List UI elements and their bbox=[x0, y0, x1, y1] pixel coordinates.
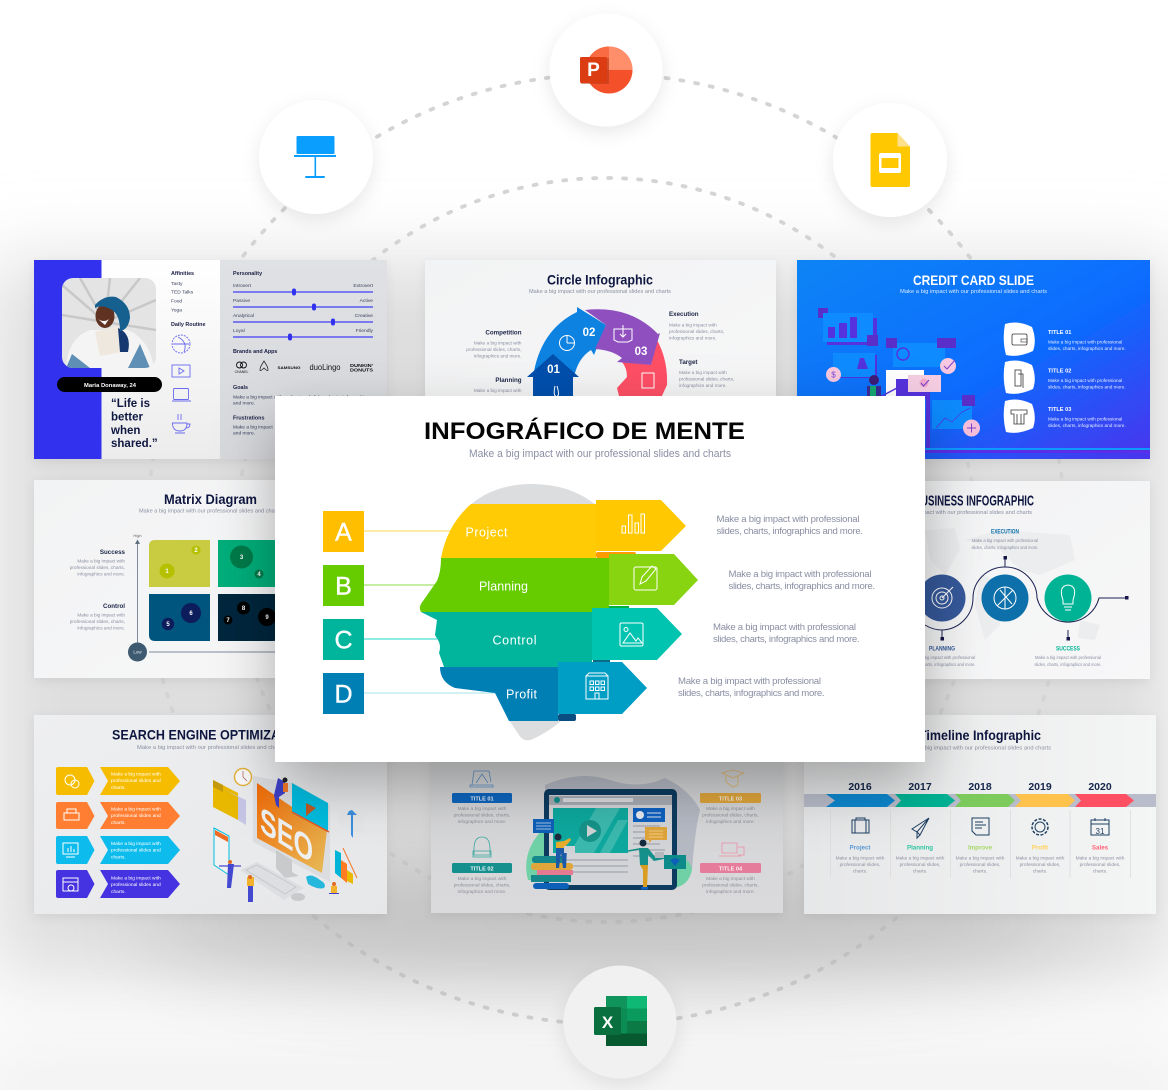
arrow rows: charts. bbox=[111, 854, 126, 860]
affinities: Yoga bbox=[171, 308, 182, 314]
matrix bubbles: 8 bbox=[242, 606, 246, 612]
quote: “Life is bbox=[111, 398, 150, 410]
four titled notes: infographics and more. bbox=[706, 889, 755, 895]
circular arrows: 02 bbox=[583, 327, 595, 339]
arrow rows: charts. bbox=[111, 820, 126, 826]
process circles bbox=[918, 574, 1092, 622]
timeline entries: professional slides, bbox=[1080, 862, 1120, 868]
arrow rows: charts. bbox=[111, 785, 126, 791]
personality sliders: Introvert bbox=[233, 283, 252, 289]
feature rows: TITLE 02 bbox=[1048, 368, 1071, 374]
icon: Google Slides bbox=[833, 103, 947, 217]
years: 2020 bbox=[1088, 781, 1112, 793]
panel: credit card slide: Make a big impact with our professional slides and charts bbox=[900, 289, 1047, 295]
four titled notes: Make a big impact with bbox=[706, 876, 755, 882]
panel: credit card slide bbox=[797, 260, 1150, 459]
panel: circle infographic bbox=[425, 260, 776, 460]
side labels: infographics and more. bbox=[474, 354, 522, 358]
SEO illustration: SEO bbox=[260, 799, 313, 872]
affinities bbox=[171, 271, 205, 328]
side labels: Success bbox=[100, 549, 126, 556]
feature rows: Make a big impact with professional bbox=[1048, 378, 1122, 383]
panel: online learning bbox=[431, 740, 783, 913]
feature rows: slides, charts, infographics and more. bbox=[1048, 346, 1126, 351]
personality sliders: Friendly bbox=[356, 328, 374, 334]
four titled notes: professional slides, charts, bbox=[454, 812, 510, 818]
feature rows bbox=[1004, 323, 1126, 433]
icon: PowerPoint: P bbox=[587, 60, 600, 81]
illustration: $ bbox=[831, 370, 836, 380]
daily routine icons bbox=[172, 335, 191, 433]
head illustration bbox=[420, 484, 636, 740]
connector line bbox=[925, 556, 1128, 640]
panel: search engine optimization: Make a big impact with our professional slides and charts bbox=[137, 745, 284, 751]
brands and apps: SAMSUNG bbox=[278, 365, 300, 370]
timeline entries: charts. bbox=[1093, 868, 1107, 874]
timeline entries: Make a big impact with bbox=[956, 856, 1005, 862]
matrix bubbles: 5 bbox=[166, 622, 170, 628]
arrow rows: Make a big impact with bbox=[111, 772, 161, 778]
stage labels bbox=[908, 528, 1102, 667]
panel: search engine optimization bbox=[34, 715, 387, 914]
band labels: Control bbox=[492, 634, 536, 648]
descriptions: slides, charts, infographics and more. bbox=[728, 581, 875, 592]
four titled notes: TITLE 04 bbox=[719, 866, 743, 872]
four titled notes: TITLE 01 bbox=[470, 796, 494, 802]
goals and frustrations: and more. bbox=[233, 400, 255, 406]
matrix bubbles: 4 bbox=[257, 572, 261, 578]
side labels: Make a big impact with bbox=[77, 558, 125, 564]
matrix axes: High bbox=[133, 533, 142, 538]
personality sliders bbox=[233, 271, 374, 340]
years: 2018 bbox=[968, 781, 992, 793]
years bbox=[848, 781, 1112, 793]
timeline entries: professional slides, bbox=[900, 862, 940, 868]
matrix bubbles: 2 bbox=[194, 548, 198, 554]
side labels: Competition bbox=[485, 330, 522, 336]
timeline entries: Planning bbox=[907, 844, 933, 852]
affinities: Affinities bbox=[171, 271, 194, 277]
descriptions: slides, charts, infographics and more. bbox=[678, 688, 824, 699]
four titled notes: professional slides, charts, bbox=[702, 882, 759, 888]
stage labels: slides, charts, infographics and more. bbox=[1034, 662, 1102, 667]
panel: business infographic bbox=[880, 481, 1150, 679]
side labels: Make a big impact with bbox=[474, 388, 522, 393]
timeline entries: Profit bbox=[1032, 844, 1048, 852]
four titled notes: professional slides, charts, bbox=[702, 812, 759, 818]
brands and apps: duoLingo bbox=[310, 362, 341, 372]
years: 2017 bbox=[908, 781, 932, 793]
timeline entries: charts. bbox=[913, 868, 927, 874]
band labels: Planning bbox=[479, 580, 528, 594]
arrow rows: Make a big impact with bbox=[111, 841, 161, 847]
personality sliders: Passive bbox=[233, 298, 250, 304]
panel: matrix diagram: Make a big impact with our professional slides and charts bbox=[139, 508, 281, 514]
affinities: Daily Routine bbox=[171, 322, 205, 328]
timeline entries: charts. bbox=[1033, 868, 1047, 874]
timeline icons bbox=[852, 818, 1109, 838]
side labels: Make a big impact with bbox=[77, 612, 125, 618]
four titled notes: professional slides, charts, bbox=[454, 882, 510, 888]
matrix axes bbox=[128, 533, 278, 662]
side labels: Make a big impact with bbox=[669, 322, 717, 328]
stage labels: Make a big impact with professional bbox=[972, 538, 1038, 543]
descriptions: slides, charts, infographics and more. bbox=[713, 634, 860, 645]
years: 2019 bbox=[1028, 781, 1052, 793]
side labels: Make a big impact with bbox=[679, 370, 727, 375]
icon: Keynote bbox=[259, 100, 373, 214]
years: 2016 bbox=[848, 781, 872, 793]
feature rows: Make a big impact with professional bbox=[1048, 416, 1122, 422]
four titled notes: infographics and more. bbox=[458, 889, 506, 895]
tag icons bbox=[586, 514, 657, 699]
feature rows: slides, charts, infographics and more. bbox=[1048, 423, 1126, 428]
timeline entries: Make a big impact with bbox=[896, 856, 945, 862]
stage labels: Make a big impact with professional bbox=[909, 655, 975, 660]
arrow rows: professional slides and bbox=[111, 882, 161, 888]
matrix bubbles: 1 bbox=[165, 569, 169, 575]
heading: Matrix Diagram bbox=[164, 491, 257, 507]
feature rows: slides, charts, infographics and more. bbox=[1048, 384, 1126, 390]
matrix bubbles: 7 bbox=[226, 618, 230, 624]
band labels: Project bbox=[466, 526, 508, 540]
circular arrows: 03 bbox=[635, 346, 647, 358]
brands and apps: DUNKIN' bbox=[350, 363, 373, 368]
quote: shared.” bbox=[111, 438, 158, 450]
four titled notes bbox=[452, 793, 761, 895]
descriptions: Make a big impact with professional bbox=[716, 514, 860, 525]
descriptions: Make a big impact with professional bbox=[713, 622, 856, 633]
brands and apps: DONUTS bbox=[350, 368, 373, 372]
learning illustration bbox=[526, 776, 700, 890]
side labels: Execution bbox=[669, 311, 699, 318]
note icons bbox=[470, 770, 744, 857]
descriptions bbox=[678, 514, 875, 699]
circular arrows bbox=[527, 307, 667, 400]
timeline ribbon bbox=[804, 794, 1156, 807]
matrix axes: Low bbox=[133, 650, 142, 654]
timeline entries: charts. bbox=[973, 868, 987, 874]
side labels: professional slides, charts, bbox=[669, 329, 724, 334]
brands and apps: Brands and Apps bbox=[233, 349, 277, 355]
letter boxes with leader lines bbox=[323, 511, 497, 714]
SEO illustration bbox=[213, 768, 364, 902]
personality sliders: Analytical bbox=[233, 313, 254, 319]
matrix bubbles bbox=[160, 546, 276, 630]
stage labels: PLANNING bbox=[929, 646, 955, 652]
goals and frustrations: and more. bbox=[233, 430, 255, 436]
goals and frustrations: Frustrations bbox=[233, 416, 264, 422]
timeline entries bbox=[836, 844, 1125, 874]
letter boxes with leader lines: A bbox=[335, 518, 352, 546]
side labels: Planning bbox=[495, 377, 522, 384]
dashed orbit: inner bbox=[234, 178, 978, 922]
arrow rows: professional slides and bbox=[111, 813, 161, 819]
side labels: Control bbox=[103, 603, 125, 610]
timeline entries: professional slides, bbox=[960, 862, 1000, 868]
arrow rows: Make a big impact with bbox=[111, 806, 161, 812]
side labels: infographics and more. bbox=[669, 336, 717, 340]
panel: timeline infographic: 31 bbox=[1096, 827, 1105, 836]
feature rows: TITLE 03 bbox=[1048, 407, 1071, 413]
personality sliders: Loyal bbox=[233, 328, 245, 334]
side labels: infographics and more. bbox=[77, 626, 125, 630]
stage labels: slides, charts, infographics and more. bbox=[908, 662, 976, 667]
title: INFOGRÁFICO DE MENTE bbox=[424, 417, 745, 445]
subtitle: Make a big impact with our professional slides and charts bbox=[469, 448, 731, 460]
lower shadow falling over the orbits bbox=[136, 860, 1076, 990]
four titled notes: TITLE 02 bbox=[470, 866, 494, 872]
panel: main card, mind infographic bbox=[275, 396, 925, 762]
affinities: Food bbox=[171, 298, 182, 304]
quote: when bbox=[110, 425, 140, 437]
feature rows: TITLE 01 bbox=[1048, 330, 1071, 336]
icon: Excel: X bbox=[602, 1013, 614, 1032]
feature rows: Make a big impact with professional bbox=[1048, 340, 1122, 344]
side labels: Target bbox=[679, 359, 697, 366]
name pill bbox=[57, 377, 162, 392]
timeline entries: Sales bbox=[1092, 844, 1109, 852]
timeline entries: Make a big impact with bbox=[836, 856, 885, 862]
descriptions: Make a big impact with professional bbox=[678, 676, 821, 687]
world map bbox=[925, 528, 1100, 640]
heading: CREDIT CARD SLIDE bbox=[913, 272, 1034, 288]
four titled notes: Make a big impact with bbox=[458, 876, 507, 882]
side labels: professional slides, charts, bbox=[70, 619, 125, 624]
side labels: professional slides, charts, bbox=[70, 565, 125, 570]
arrow rows: charts. bbox=[111, 889, 126, 895]
panel: matrix diagram bbox=[34, 480, 314, 678]
timeline entries: professional slides, bbox=[1020, 862, 1060, 868]
timeline entries: Improve bbox=[968, 844, 993, 852]
panel: persona slide bbox=[34, 260, 387, 459]
matrix bubbles: 9 bbox=[265, 615, 269, 621]
side labels bbox=[70, 549, 126, 630]
band labels: Profit bbox=[506, 688, 538, 702]
letter boxes with leader lines: D bbox=[334, 680, 353, 708]
stage labels: SUCCESS bbox=[1056, 646, 1080, 652]
panel: timeline infographic bbox=[804, 715, 1156, 914]
heading: BUSINESS INFOGRAPHIC bbox=[914, 492, 1034, 510]
side labels: infographics and more. bbox=[77, 572, 125, 576]
stage labels: EXECUTION bbox=[991, 528, 1019, 536]
arrow rows bbox=[56, 767, 180, 898]
brands and apps: CHANEL bbox=[235, 370, 248, 374]
stage labels: Make a big impact with professional bbox=[1035, 655, 1101, 660]
goals and frustrations: Make a big impact with professional slides, charts, infographics bbox=[233, 394, 370, 400]
side labels: professional slides, charts, bbox=[466, 347, 522, 352]
heading: Circle Infographic bbox=[547, 272, 653, 288]
circular arrows: 01 bbox=[547, 364, 560, 376]
goals and frustrations: Make a big impact bbox=[233, 424, 273, 430]
timeline entries: professional slides, bbox=[840, 862, 880, 868]
personality sliders: Extrovert bbox=[353, 283, 374, 289]
matrix quadrants bbox=[149, 540, 279, 641]
timeline entries: Make a big impact with bbox=[1076, 856, 1125, 862]
timeline entries: Make a big impact with bbox=[1016, 856, 1065, 862]
panel: circle infographic: Make a big impact with our professional slides and charts bbox=[529, 289, 671, 295]
letter boxes with leader lines: B bbox=[335, 572, 352, 600]
persona photo bbox=[62, 278, 156, 368]
heading: SEARCH ENGINE OPTIMIZATION bbox=[112, 726, 309, 742]
matrix bubbles: 3 bbox=[240, 555, 244, 561]
dashed orbit: outer bbox=[145, 74, 1067, 1024]
matrix bubbles: 6 bbox=[189, 611, 193, 617]
timeline entries: Project bbox=[850, 844, 870, 852]
timeline entries: charts. bbox=[853, 868, 867, 874]
descriptions: slides, charts, infographics and more. bbox=[716, 526, 863, 537]
four titled notes: Make a big impact with bbox=[458, 806, 507, 812]
arrow tags bbox=[558, 500, 698, 714]
quote: better bbox=[111, 412, 143, 424]
panel: persona slide: Maria Donaway, 24 bbox=[84, 383, 137, 389]
heading: Timeline Infographic bbox=[919, 727, 1041, 743]
goals and frustrations bbox=[233, 385, 370, 436]
descriptions: Make a big impact with professional bbox=[728, 569, 872, 580]
side labels: professional slides, charts, bbox=[679, 376, 734, 382]
affinities: TED Talks bbox=[171, 290, 194, 296]
icon: PowerPoint bbox=[550, 14, 662, 126]
four titled notes: infographics and more. bbox=[706, 819, 755, 825]
side labels: infographics and more. bbox=[679, 383, 727, 388]
stage labels: slides, charts, infographics and more. bbox=[972, 545, 1038, 550]
arrow rows: professional slides and bbox=[111, 848, 161, 854]
brands and apps bbox=[233, 349, 373, 374]
personality sliders: Active bbox=[360, 298, 373, 304]
four titled notes: infographics and more. bbox=[458, 819, 506, 825]
arrow rows: Make a big impact with bbox=[111, 876, 161, 882]
band labels bbox=[466, 526, 538, 702]
goals and frustrations: Goals bbox=[233, 385, 248, 391]
personality sliders: Creative bbox=[355, 313, 373, 319]
illustration bbox=[818, 308, 980, 450]
letter boxes with leader lines: C bbox=[334, 626, 353, 654]
personality sliders: Personality bbox=[233, 271, 262, 277]
affinities: Tasty bbox=[171, 281, 183, 287]
side labels bbox=[466, 311, 734, 393]
arrow rows: professional slides and bbox=[111, 778, 161, 784]
panel: business infographic: Make a big impact with our professional slides and charts bbox=[888, 510, 1032, 516]
panel: timeline infographic: Make a big impact with our professional slides and charts bbox=[904, 746, 1051, 752]
side labels: Make a big impact with bbox=[474, 340, 522, 346]
four titled notes: TITLE 03 bbox=[719, 796, 742, 802]
four titled notes: Make a big impact with bbox=[706, 806, 755, 812]
icon: Excel bbox=[564, 966, 676, 1078]
